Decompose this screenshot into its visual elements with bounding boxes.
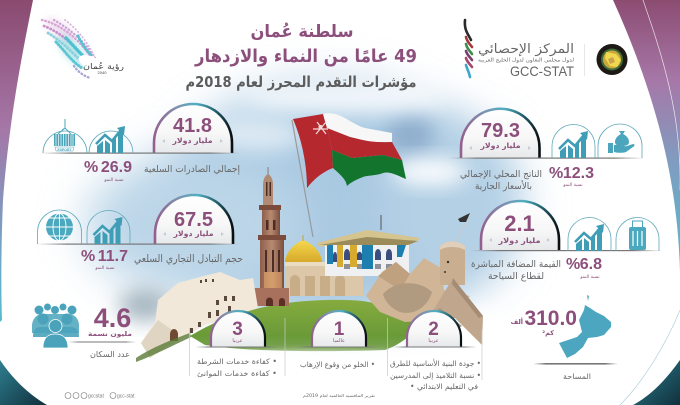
stat: exports: 26.9: [101, 159, 132, 176]
rank: 3rd in Arab world: • كفاءة خدمات الشرطة: [197, 357, 277, 366]
stat: area: ألف: [511, 317, 523, 326]
fort and rocks: [366, 213, 483, 345]
icon: people: [32, 304, 79, 348]
arc: [154, 104, 232, 153]
logo: Oman vision 2040: رؤية عُمان: [83, 62, 124, 71]
white fade below hill: [155, 352, 485, 388]
stat: GDP: نسبة النمو: [562, 183, 583, 188]
stat: GDP: 79.3: [481, 120, 520, 142]
stat: tourism: نسبة النمو: [579, 275, 600, 280]
bottom left corner: [0, 360, 47, 405]
icon: export container: EXPORT: [58, 148, 72, 152]
footer: source note: تقرير التنافسية العالمية لعام 2019م: [303, 393, 375, 398]
icon: globe: [38, 210, 82, 244]
emblem: [596, 44, 628, 75]
logo: Oman vision 2040: [41, 14, 124, 78]
stat: population: مليون نسمة: [88, 330, 132, 338]
title: سلطنة عُمان: [250, 22, 354, 42]
stat: exports: إجمالي الصادرات السلعية: [144, 164, 240, 175]
stat: GDP: [448, 109, 644, 192]
icon: growth chart: [552, 124, 595, 158]
stat: exports: نسبة النمو: [103, 178, 124, 183]
title: 49 عامًا من النماء والازدهار: [194, 46, 417, 67]
stat: GDP: 12.3: [563, 165, 594, 182]
footer: social handles: [65, 392, 135, 400]
stat: trade exchange: حجم التبادل التجاري السلعي: [134, 253, 243, 265]
stat: trade exchange: نسبة النمو: [94, 266, 115, 271]
icon: growth chart: [568, 217, 611, 251]
stat: tourism: 6.8: [580, 256, 602, 273]
sky and clouds: [85, 83, 520, 357]
rank: 1st globally: [295, 311, 380, 369]
stat: trade exchange: %: [81, 248, 95, 265]
flag of Oman: [292, 113, 406, 237]
mosque: [253, 167, 363, 306]
rank: 3rd in Arab world: [195, 311, 280, 378]
rank: 1st globally: 1: [334, 319, 345, 340]
icon: growth chart: [87, 211, 130, 244]
stat: tourism: القيمة المضافة المباشرة: [471, 259, 561, 270]
white buildings: [136, 272, 258, 362]
stat: tourism: مليار دولار: [497, 236, 541, 245]
stat: tourism: %: [566, 256, 580, 273]
stat: GDP: %: [549, 165, 563, 182]
stat: trade exchange: مليار دولار: [172, 229, 214, 238]
logo: GCC-STAT: [465, 20, 628, 79]
stat: tourism: لقطاع السياحة: [488, 271, 544, 282]
rank: 2nd in Arab world: في التعليم الابتدائي •: [410, 382, 478, 391]
dividers: [190, 318, 482, 380]
rank: 2nd in Arab world: عربيا: [428, 338, 439, 344]
stat: exports: 41.8: [173, 115, 212, 137]
stat: population: [32, 303, 136, 359]
left gradient band: [0, 0, 33, 322]
footer: social handles: gcc-stat: [117, 394, 135, 400]
stat: tourism: [470, 201, 662, 282]
green hill: [190, 300, 420, 351]
stat: trade exchange: [36, 195, 243, 271]
stat: population: 4.6: [94, 303, 131, 333]
stat: exports: %: [84, 159, 98, 176]
rank: 1st globally: عالميا: [333, 338, 345, 344]
gold dome: [285, 240, 322, 262]
stat: tourism: 2.1: [504, 211, 535, 236]
minaret: [253, 167, 289, 306]
rank: 2nd in Arab world: • نسبة التلاميذ إلى المدرسين: [390, 371, 481, 380]
logo: Oman vision 2040: 2040: [98, 70, 107, 75]
stat: area: [511, 295, 618, 381]
stat: GDP: بالأسعار الجارية: [475, 180, 532, 192]
rank: 2nd in Arab world: • جودة البنية الأساسية للطرق: [390, 358, 481, 368]
footer: social handles: gccstat: [88, 394, 104, 400]
right gradient band: [613, 0, 680, 272]
icon: money bag in hand: [598, 124, 642, 158]
logo: GCC-STAT: لدول مجلس التعاون لدول الخليج العربية: [478, 58, 575, 64]
stat: GDP: مليار دولار: [479, 141, 521, 150]
stat: exports: مليار دولار: [171, 136, 213, 145]
rank: 3rd in Arab world: عربيا: [232, 338, 243, 344]
title: مؤشرات التقدم المحرز لعام 2018م: [186, 73, 416, 91]
icon: export container: [43, 119, 87, 153]
stat: area: 310.0: [524, 307, 577, 330]
stat: trade exchange: 11.7: [98, 248, 128, 265]
rank: 1st globally: • الخلو من وقوع الإرهاب: [300, 360, 375, 369]
rank: 3rd in Arab world: • كفاءة خدمات الموانئ: [197, 369, 277, 378]
stat: trade exchange: 67.5: [174, 209, 213, 231]
icon: Oman map: [559, 295, 611, 358]
rank: 2nd in Arab world: 2: [428, 319, 439, 340]
stat: area: كم²: [542, 329, 554, 337]
title: [186, 22, 417, 91]
icon: growth chart: [89, 126, 133, 153]
rank: 3rd in Arab world: 3: [232, 319, 243, 340]
stat: GDP: الناتج المحلي الإجمالي: [460, 169, 542, 180]
rank: 2nd in Arab world: [390, 311, 481, 391]
mosque body: [285, 262, 363, 296]
ribbon: [465, 20, 472, 77]
icon: luggage: [616, 217, 659, 251]
bottom right corner: [633, 360, 680, 405]
logo: GCC-STAT: المركز الإحصائي: [478, 42, 574, 57]
stat: exports: [40, 104, 240, 183]
logo: GCC-STAT: GCC-STAT: [510, 63, 574, 79]
stat: population: عدد السكان: [90, 350, 130, 359]
palace: [317, 215, 420, 276]
stat: area: المساحة: [563, 372, 591, 381]
